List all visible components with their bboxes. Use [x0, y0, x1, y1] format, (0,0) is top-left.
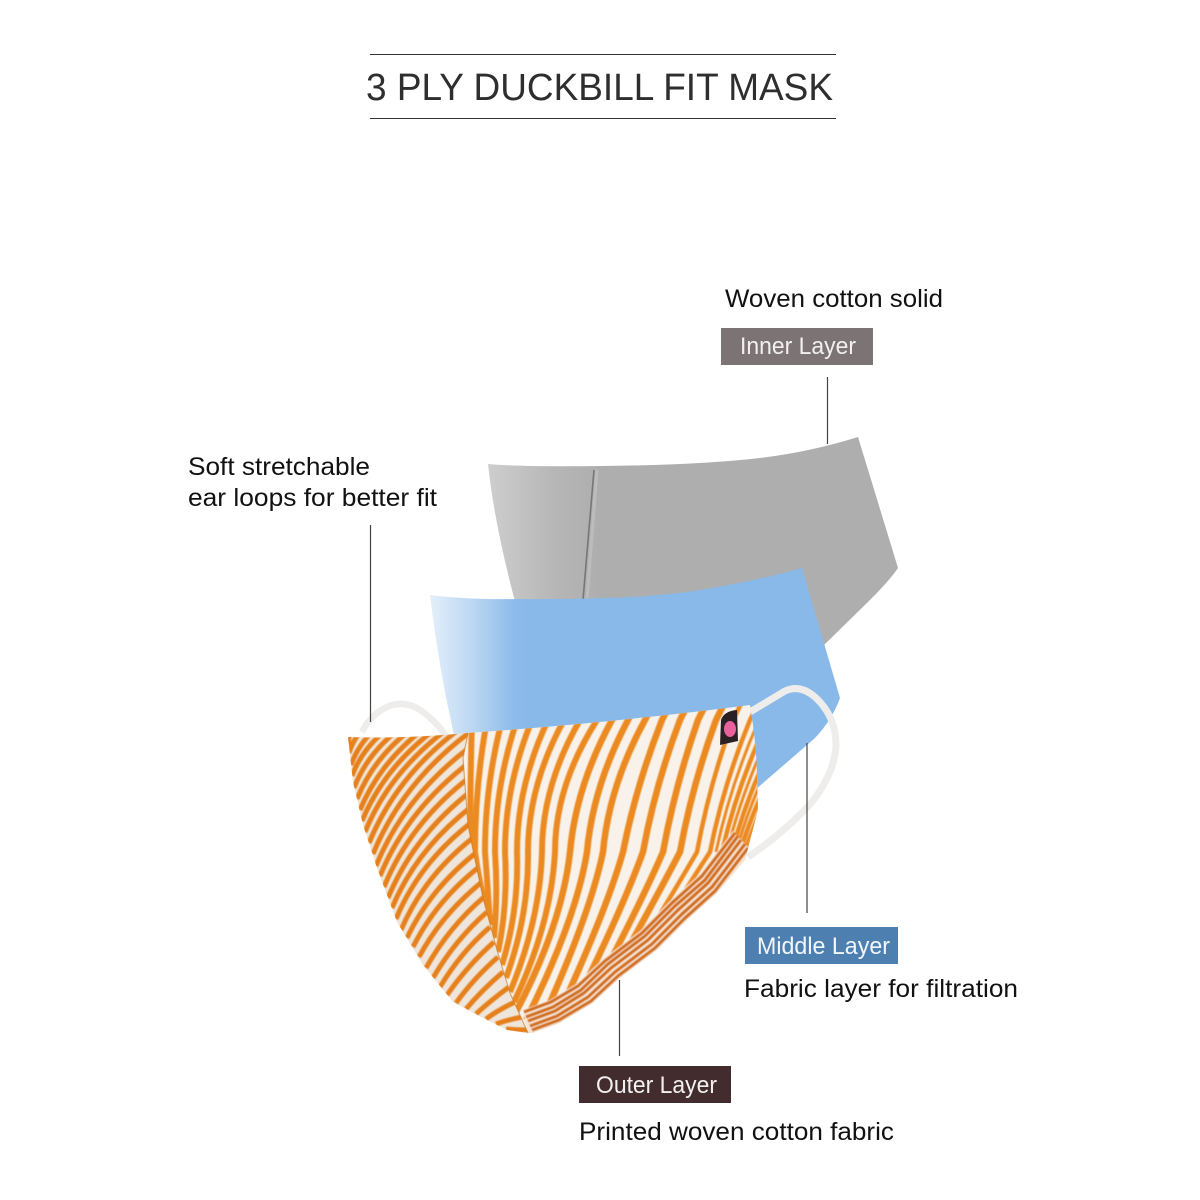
- tag: outer layer: Outer Layer: [596, 1072, 717, 1099]
- text: printed woven: Printed woven cotton fabric: [579, 1118, 894, 1146]
- leader line: ear loops: [370, 525, 372, 722]
- text: ear loops: ear loops for better fit: [188, 484, 437, 512]
- ear loop: right: [748, 689, 836, 857]
- text: ear loops: [188, 453, 437, 512]
- text: fabric layer: Fabric layer for filtration: [744, 975, 1018, 1003]
- tag: inner layer: Inner Layer: [740, 333, 856, 360]
- inner layer mask: grey: [488, 437, 898, 700]
- outer layer mask: orange stripes: [348, 705, 758, 1034]
- text: woven cotton solid: Woven cotton solid: [725, 285, 943, 313]
- middle layer mask: blue: [430, 568, 840, 800]
- leader line: middle layer: [806, 743, 808, 913]
- text: ear loops: Soft stretchable: [188, 453, 370, 481]
- tag: middle layer: Middle Layer: [757, 933, 890, 960]
- leader line: inner layer: [826, 377, 828, 444]
- ear loop: left: [362, 704, 447, 738]
- tag: outer layer: [579, 1066, 731, 1103]
- tag: inner layer: [721, 328, 873, 365]
- tag: middle layer: [745, 927, 898, 964]
- leader line: outer layer: [618, 980, 620, 1056]
- icon: brand tag: [720, 710, 738, 745]
- title: 3 PLY DUCKBILL FIT MASK: [366, 67, 833, 109]
